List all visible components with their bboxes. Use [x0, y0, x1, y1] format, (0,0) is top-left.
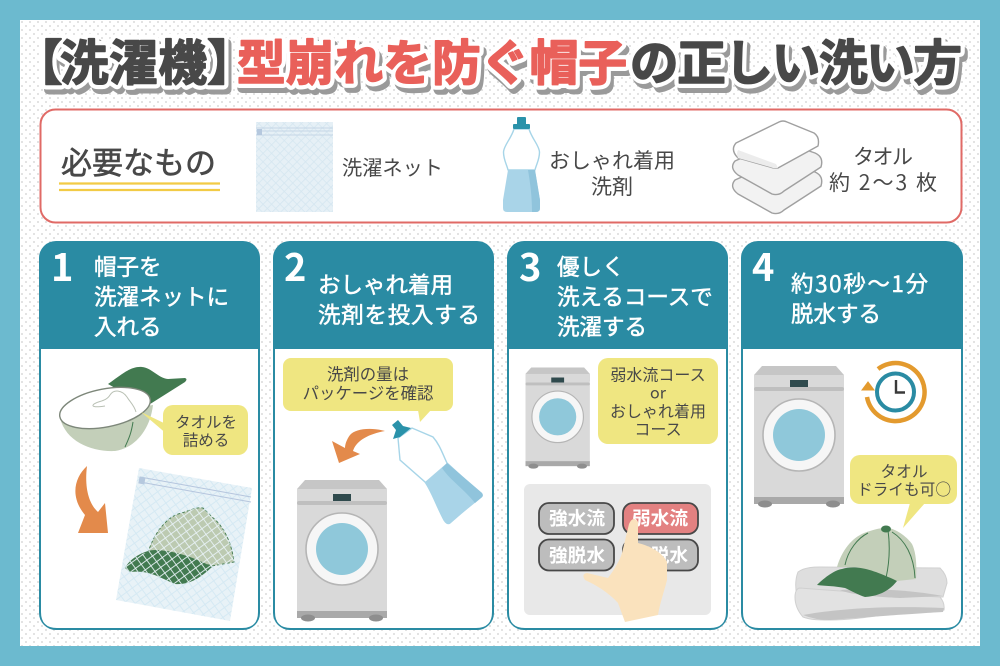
callout: course: おしゃれ着用 — [610, 398, 706, 422]
callout: detergent amount — [283, 358, 453, 422]
heading: step 4 — [791, 267, 928, 329]
callout: towel: タオルを — [175, 410, 237, 432]
title: 】 — [207, 24, 256, 94]
icon: cap on towels — [795, 526, 947, 620]
heading: step 1 — [94, 250, 229, 342]
heading: step 2: おしゃれ着用 — [318, 268, 453, 300]
icon: hat stuffed with towel — [56, 367, 186, 451]
callout: towel dry: タオル — [880, 459, 928, 482]
callout: course: コース — [634, 416, 682, 440]
step number 1: 1 — [51, 237, 73, 292]
title: 【 — [14, 24, 63, 94]
panel: step 3 — [507, 237, 728, 630]
title: 】 — [210, 29, 259, 99]
step number 2: 2 — [284, 237, 306, 292]
control panel — [524, 484, 711, 622]
title: 型崩れを防ぐ帽子 — [240, 29, 630, 99]
title: 洗濯機 — [60, 24, 207, 94]
icon: washing machine — [754, 366, 844, 508]
title: 【 — [14, 24, 63, 94]
icon: tilted detergent bottle — [392, 420, 483, 524]
heading: step 2 — [318, 268, 480, 330]
callout: detergent amount: パッケージを確認 — [303, 380, 433, 404]
heading: step 3 — [557, 250, 713, 342]
title: 【 — [17, 29, 66, 99]
icon: detergent bottle — [503, 117, 540, 212]
callout: detergent amount: 洗剤の量は — [327, 361, 409, 385]
panel: step 2 — [273, 237, 494, 630]
label: towels — [829, 141, 937, 197]
icon: laundry net — [256, 122, 333, 212]
callout: course — [598, 358, 718, 444]
icon: washing machine — [297, 480, 387, 622]
icon: washing machine small — [526, 368, 590, 469]
title: の正しい洗い方 — [633, 29, 965, 99]
callout: towel — [141, 405, 248, 455]
title: 型崩れを防ぐ帽子 — [237, 24, 627, 94]
step number 3: 3 — [519, 237, 541, 292]
panel: step 1 — [39, 237, 260, 630]
panel: step 4 — [741, 237, 963, 630]
heading: step 4: 脱水する — [791, 297, 881, 329]
label: towels: 約 2〜3 枚 — [829, 167, 937, 197]
title: の正しい洗い方 — [630, 24, 962, 94]
title: 型崩れを防ぐ帽子 — [237, 24, 627, 94]
label: detergent: 洗剤 — [591, 171, 633, 201]
heading: step 4: 約30秒〜1分 — [791, 267, 928, 299]
arrow: orange pour — [332, 429, 385, 463]
heading: step 3: 洗えるコースで — [557, 280, 713, 312]
button: strong flow: 強水流 — [549, 504, 605, 531]
callout: towel: 詰める — [183, 428, 229, 450]
callout: towel dry: ドライも可○ — [857, 477, 951, 500]
button: strong spin: 強脱水 — [549, 541, 605, 568]
title: 洗濯機 — [60, 24, 207, 94]
button: gentle spin: 弱脱水 — [632, 541, 688, 568]
icon: cap in net — [110, 468, 252, 621]
button: strong flow — [539, 503, 614, 534]
button: gentle flow: 弱水流 — [632, 504, 688, 531]
arrow: orange down — [75, 466, 108, 533]
label: towels: タオル — [853, 141, 913, 171]
callout: course: or — [650, 380, 667, 404]
icon: pointing hand — [583, 519, 667, 622]
label: detergent: おしゃれ着用 — [549, 145, 675, 175]
panel: required items — [40, 110, 962, 222]
heading: step 3: 優しく — [557, 250, 625, 282]
label: laundry net: 洗濯ネット — [342, 152, 443, 181]
title — [14, 24, 965, 99]
heading: step 2: 洗剤を投入する — [318, 298, 480, 330]
heading: step 1: 入れる — [94, 310, 162, 342]
icon: clock timer — [862, 363, 925, 421]
title: 洗濯機 — [63, 29, 210, 99]
step number 4: 4 — [752, 237, 774, 292]
button: gentle spin — [623, 540, 698, 570]
heading: required items: 必要なもの — [61, 138, 216, 183]
label: detergent — [549, 145, 675, 201]
callout: towel dry — [850, 455, 957, 528]
title: の正しい洗い方 — [630, 24, 962, 94]
button: gentle flow — [623, 503, 698, 534]
callout: course: 弱水流コース — [610, 362, 706, 386]
heading: step 1: 洗濯ネットに — [94, 280, 229, 312]
heading: step 1: 帽子を — [94, 250, 162, 282]
title: 】 — [207, 24, 256, 94]
button: strong spin — [539, 540, 614, 570]
heading: step 3: 洗濯する — [557, 310, 647, 342]
icon: towels — [733, 121, 822, 214]
